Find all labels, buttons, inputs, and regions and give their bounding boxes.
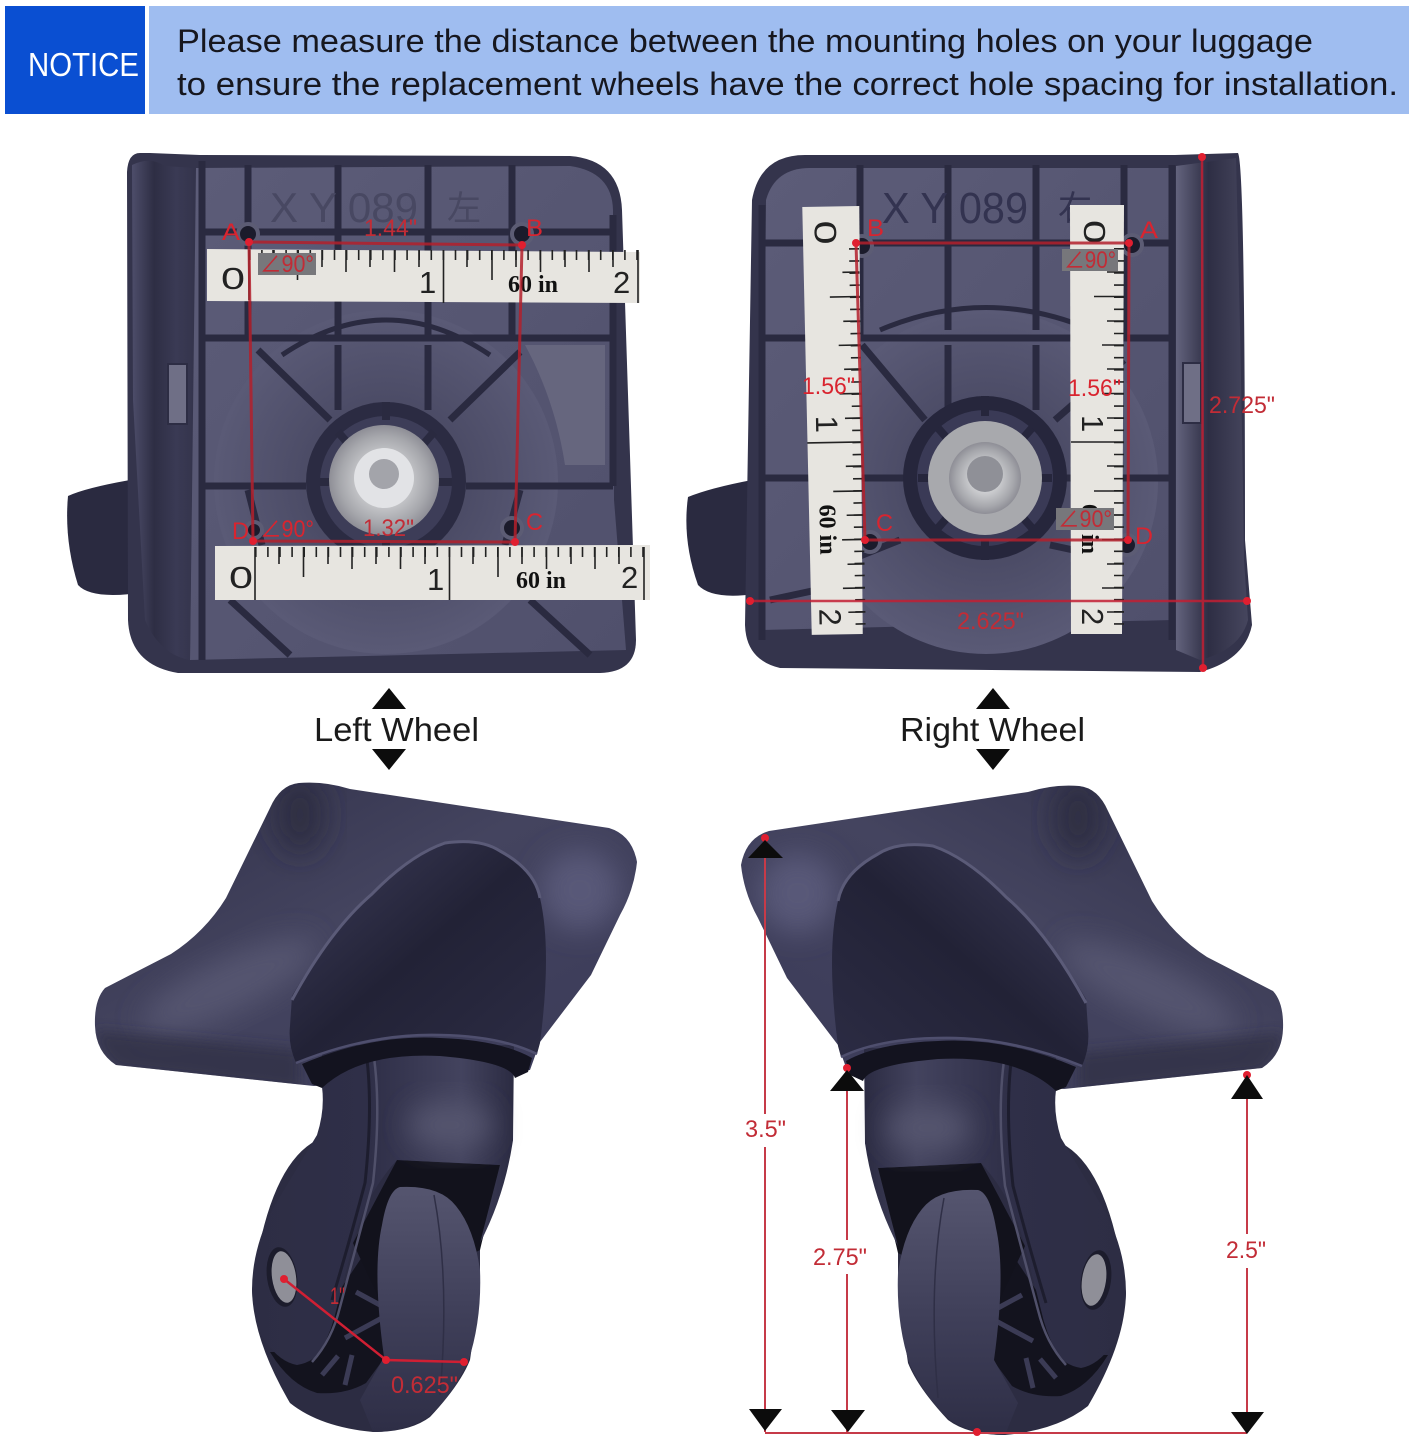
notice message xyxy=(149,6,1409,114)
notice message: Please measure the distance between the mounting holes on your luggage xyxy=(177,23,1313,59)
left wheel bottom measuring tape: 0 xyxy=(229,560,253,595)
left wheel top measuring tape: 1 xyxy=(419,265,436,300)
left wheel bottom measuring tape xyxy=(215,545,650,600)
mould mark: X Y 089 xyxy=(882,184,1028,233)
plate disc xyxy=(214,310,558,654)
height labels: 2.75" xyxy=(813,1244,867,1271)
height dimension lines xyxy=(761,834,1251,1436)
right wheel hole spacing annotations: ∠90° xyxy=(1064,247,1116,274)
left wheel top measuring tape: 2 xyxy=(613,265,630,300)
right wheel left measuring tape xyxy=(802,206,867,635)
left wheel hole spacing annotations: ∠90° xyxy=(260,516,314,543)
left wheel top measuring tape: 0 xyxy=(221,261,245,296)
right wheel hole spacing annotations: 1.56" xyxy=(1068,375,1121,402)
right wheel hole spacing annotations: C xyxy=(876,510,893,537)
right wheel hole spacing annotations: A xyxy=(1140,217,1158,244)
right wheel hole spacing annotations xyxy=(746,153,1275,672)
right wheel left measuring tape: 1 xyxy=(809,415,844,433)
wheel size annotations xyxy=(280,1275,468,1399)
hub with bolt xyxy=(306,402,466,562)
mould mark: 左 xyxy=(447,190,481,228)
right wheel hole spacing annotations: 1.56" xyxy=(802,373,855,400)
wheel size annotations: 1" xyxy=(330,1283,345,1310)
left wheel hole spacing annotations xyxy=(222,215,543,546)
left wheel hole spacing annotations: ∠90° xyxy=(260,251,314,278)
hub with bolt xyxy=(903,396,1067,560)
height labels: 2.5" xyxy=(1226,1237,1266,1264)
left wheel bottom measuring tape: 2 xyxy=(621,560,638,595)
wheel size annotations: 0.625" xyxy=(391,1372,458,1399)
height dimension arrows xyxy=(748,840,1264,1434)
right wheel right measuring tape: 0 xyxy=(1077,220,1112,244)
plate rear tab xyxy=(67,480,130,595)
left wheel label with arrows: Left Wheel xyxy=(314,711,479,748)
notice label box: NOTICE xyxy=(28,46,139,83)
mounting holes xyxy=(238,224,532,538)
right wheel left measuring tape: 0 xyxy=(808,220,843,245)
plate size dimensions: 2.625" xyxy=(957,608,1024,635)
notice message: to ensure the replacement wheels have the correct hole spacing for installation. xyxy=(177,66,1398,102)
right wheel mounting plate xyxy=(686,153,1252,672)
side slot xyxy=(168,364,187,424)
right shaded panel xyxy=(525,345,605,465)
height labels xyxy=(745,1116,1266,1271)
right caster wheel xyxy=(741,778,1283,1436)
left caster wheel xyxy=(95,775,637,1432)
right wheel label with arrows xyxy=(900,688,1085,770)
right wheel left measuring tape: 60 in xyxy=(813,504,840,555)
left wheel hole spacing annotations: C xyxy=(526,509,543,536)
plate rear tab xyxy=(686,480,755,596)
right wheel right measuring tape: 2 xyxy=(1075,608,1110,625)
left wheel hole spacing annotations: 1.32" xyxy=(363,515,414,542)
left wheel label with arrows xyxy=(314,688,479,770)
plate disc xyxy=(814,310,1158,654)
side slot xyxy=(1183,363,1201,423)
height labels: 3.5" xyxy=(745,1116,786,1143)
mounting holes xyxy=(852,235,1142,555)
left wheel hole spacing annotations: B xyxy=(526,215,543,242)
left wheel mounting plate xyxy=(67,153,636,673)
left wheel bottom measuring tape: 1 xyxy=(427,562,444,597)
right wheel hole spacing annotations: ∠90° xyxy=(1058,506,1112,533)
plate size dimensions: 2.725" xyxy=(1209,392,1275,419)
left wheel top measuring tape: 60 in xyxy=(508,272,558,298)
plate size dimensions xyxy=(746,153,1275,672)
left wheel bottom measuring tape: 60 in xyxy=(516,568,566,594)
left wheel hole spacing annotations: A xyxy=(222,219,240,246)
right wheel hole spacing annotations: B xyxy=(867,215,884,242)
left wheel hole spacing annotations: 1.44" xyxy=(364,215,417,242)
right wheel right measuring tape xyxy=(1070,205,1124,634)
right wheel right measuring tape: 1 xyxy=(1075,415,1110,432)
left wheel top measuring tape xyxy=(207,249,640,303)
left wheel hole spacing annotations: D xyxy=(232,518,249,545)
right wheel label with arrows: Right Wheel xyxy=(900,711,1085,748)
notice label box xyxy=(5,6,145,114)
right wheel right measuring tape: 60 in xyxy=(1076,504,1102,554)
mould mark: 右 xyxy=(1058,190,1092,228)
right wheel left measuring tape: 2 xyxy=(812,608,848,626)
mould mark: X Y 089 xyxy=(270,184,418,231)
right wheel hole spacing annotations: D xyxy=(1135,523,1153,550)
notice banner xyxy=(5,6,1409,114)
